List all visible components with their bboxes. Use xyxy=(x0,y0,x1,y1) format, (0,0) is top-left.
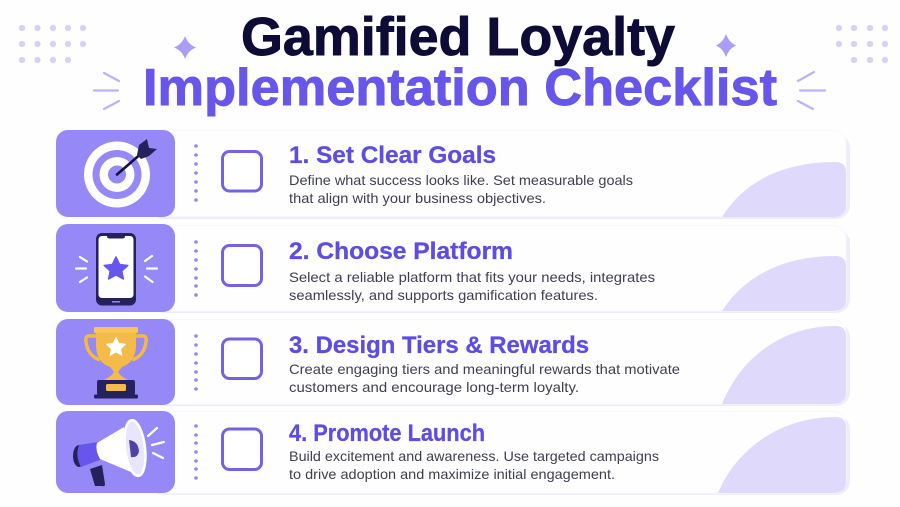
panel: step 1 xyxy=(56,130,850,219)
icon: right rays xyxy=(798,72,825,109)
card 1 background xyxy=(150,130,850,219)
heading: 3. Design Tiers & Rewards xyxy=(289,332,589,359)
title: Implementation Checklist xyxy=(143,59,777,117)
dotted divider xyxy=(194,240,198,297)
checkbox xyxy=(222,339,262,378)
title: Gamified Loyalty xyxy=(241,7,675,67)
icon: target tile xyxy=(56,130,175,217)
icon: right sparkle xyxy=(716,34,736,57)
checkbox xyxy=(222,152,262,191)
decoration: left dot grid xyxy=(19,25,86,63)
checkbox xyxy=(222,246,262,286)
description: Create engaging tiers and meaningful rewards that motivate xyxy=(289,361,680,377)
description xyxy=(289,448,659,482)
checkbox xyxy=(222,429,262,470)
heading: 4. Promote Launch xyxy=(289,420,485,447)
panel: step 4 xyxy=(56,411,850,495)
card 3 corner shape xyxy=(722,326,846,404)
heading: 2. Choose Platform xyxy=(289,238,513,265)
title xyxy=(143,7,777,117)
description: Build excitement and awareness. Use targeted campaigns xyxy=(289,448,659,464)
decoration: right dot grid xyxy=(836,25,888,63)
heading: 1. Set Clear Goals xyxy=(289,142,496,169)
description: that align with your business objectives. xyxy=(289,190,546,206)
icon: left sparkle xyxy=(174,36,196,59)
description xyxy=(289,269,655,303)
card 1 corner shape xyxy=(722,162,846,217)
description: to drive adoption and maximize initial engagement. xyxy=(289,466,615,482)
panel: step 2 xyxy=(56,224,850,313)
description: Select a reliable platform that fits your needs, integrates xyxy=(289,269,655,285)
icon: phone tile xyxy=(56,224,175,312)
card 3 background xyxy=(150,320,850,406)
dotted divider xyxy=(194,144,198,202)
description: Define what success looks like. Set measurable goals xyxy=(289,172,633,188)
dotted divider xyxy=(194,334,198,391)
dotted divider xyxy=(194,424,198,480)
card 2 corner shape xyxy=(722,256,846,311)
icon: left rays xyxy=(94,73,119,109)
description xyxy=(289,361,680,395)
icon: trophy tile xyxy=(56,319,175,405)
card 2 background xyxy=(150,226,850,313)
description xyxy=(289,172,633,206)
panel: step 3 xyxy=(56,319,850,406)
card 4 corner shape xyxy=(718,417,846,493)
icon: megaphone tile xyxy=(56,411,175,493)
description: customers and encourage long-term loyalty. xyxy=(289,379,579,395)
description: seamlessly, and supports gamification features. xyxy=(289,287,598,303)
card 4 background xyxy=(150,412,850,495)
